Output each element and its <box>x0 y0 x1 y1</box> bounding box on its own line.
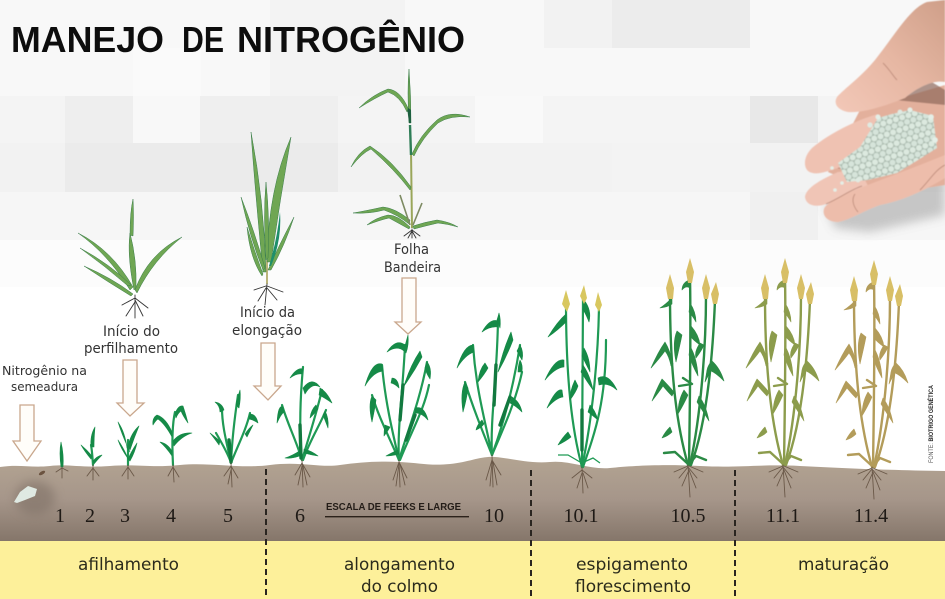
illustrated plant: início do perfilhamento <box>78 199 182 318</box>
title: MANEJO <box>11 19 164 60</box>
plant stage 5 <box>210 390 258 487</box>
phase label: alongamento do colmo: do colmo <box>361 577 438 597</box>
label: folha bandeira: Folha <box>394 242 429 258</box>
arrow: nitrogênio na semeadura <box>13 405 41 461</box>
stage numbers: 6 <box>295 505 305 527</box>
source credit: FONTE: BIOTRIGO GENÉTICA <box>927 385 935 463</box>
phase label: alongamento do colmo <box>344 555 455 597</box>
ring finger <box>824 155 945 222</box>
label: início da elongação: Início da <box>240 305 295 321</box>
stage numbers: 11.1 <box>766 505 800 527</box>
label: nitrogênio na semeadura: Nitrogênio na <box>2 363 87 378</box>
label: início da elongação: elongação <box>232 323 302 339</box>
stage numbers: 2 <box>85 505 95 527</box>
label: início da elongação <box>232 305 302 339</box>
stage numbers <box>55 505 888 527</box>
title: DE <box>182 19 224 60</box>
soil <box>0 457 945 541</box>
label: início do perfilhamento: Início do <box>103 324 160 340</box>
phase label: espigamento florescimento: florescimento <box>575 577 691 597</box>
index finger <box>805 114 885 173</box>
stage numbers: 10 <box>484 505 504 527</box>
plant stage 10.1 <box>545 285 617 493</box>
title: NITROGÊNIO <box>237 18 465 60</box>
plant stage 11.4 <box>835 260 908 499</box>
phase label: espigamento florescimento: espigamento <box>576 555 688 575</box>
illustrated plant: início da elongação <box>241 132 294 305</box>
plant stage 10 <box>457 313 523 487</box>
stage numbers: 10.5 <box>670 505 706 527</box>
plant stage 2 <box>81 427 102 480</box>
plant stage 1 <box>56 442 68 478</box>
stage numbers: 3 <box>120 505 130 527</box>
scale label: escala de feeks e large: ESCALA DE FEEKS E LARGE <box>326 501 461 513</box>
title <box>11 18 465 60</box>
label: folha bandeira <box>384 242 441 276</box>
photo: hand holding fertilizer granules <box>805 0 945 232</box>
label: nitrogênio na semeadura <box>2 363 87 394</box>
stage numbers: 5 <box>223 505 233 527</box>
label: nitrogênio na semeadura: semeadura <box>11 379 78 394</box>
arrow: folha bandeira <box>395 278 421 334</box>
phase label: alongamento do colmo: alongamento <box>344 555 455 575</box>
plant stage 6 <box>277 367 332 487</box>
dark patch and fertilizer lump in soil <box>14 470 55 515</box>
label: início do perfilhamento <box>84 324 178 357</box>
label: folha bandeira: Bandeira <box>384 260 441 276</box>
thumb <box>836 0 945 112</box>
plant stage 11.1 <box>746 258 819 497</box>
arrow: início da elongação <box>254 343 281 400</box>
phase label: afilhamento: afilhamento <box>78 555 179 575</box>
phase label: maturação: maturação <box>798 555 889 575</box>
plant stage 4 <box>153 406 192 482</box>
fertilizer granules <box>838 110 937 182</box>
stage numbers: 11.4 <box>854 505 888 527</box>
arrow: início do perfilhamento <box>117 360 144 416</box>
stage numbers: 10.1 <box>564 505 598 527</box>
phase label: espigamento florescimento <box>575 555 691 597</box>
plant stage 10.5 <box>651 258 724 497</box>
stage numbers: 4 <box>166 505 176 527</box>
stage numbers: 1 <box>55 505 65 527</box>
middle finger <box>805 170 870 206</box>
yellow band <box>0 541 945 599</box>
plant stage 7 <box>365 335 431 487</box>
illustrated plant: folha bandeira <box>351 69 470 238</box>
phase dividers <box>266 469 735 599</box>
label: início do perfilhamento: perfilhamento <box>84 341 178 357</box>
plant stage 3 <box>118 422 139 479</box>
